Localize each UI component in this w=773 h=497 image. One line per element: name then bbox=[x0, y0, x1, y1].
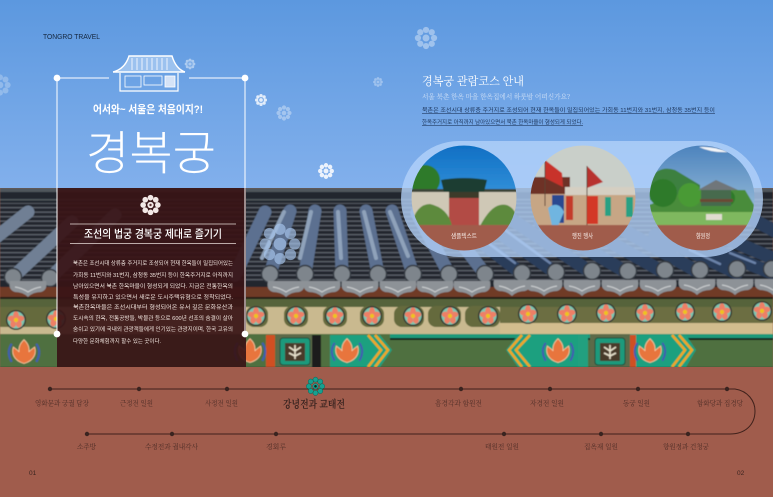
course guide heading: 경복궁 관람코스 안내 bbox=[422, 74, 524, 88]
subtitle: 어서와~ 서울은 처음이지?! bbox=[93, 103, 203, 116]
bottom timeline band bbox=[0, 367, 773, 497]
decorative snow flowers bbox=[0, 27, 437, 264]
course guide description: 북촌은 조선시대 상류층 주거지로 조성되어 현재 한옥들이 밀집되어있는 가회동 11번지와 31번지, 삼청동 35번지 등이 bbox=[422, 106, 715, 114]
body text: 도시속의 한옥, 전통공방들, 박물관 등으로 600년 선조의 숨결이 살아 bbox=[73, 314, 233, 322]
course guide description: 한옥주거지로 아직까지 남아있으면서 북촌 한옥마을이 형성되게 되었다. bbox=[422, 118, 583, 126]
panel: dark text box bbox=[54, 56, 248, 367]
panel heading bbox=[70, 224, 236, 244]
timeline labels bbox=[35, 398, 743, 451]
body text: 남아있으면서 북촌 한옥마을이 형성되게 되었다. 지금은 전통한옥의 bbox=[73, 282, 233, 290]
brand label: TONGRO TRAVEL bbox=[43, 34, 100, 41]
panel heading: 조선의 법궁 경복궁 제대로 즐기기 bbox=[84, 226, 222, 240]
course guide subheading: 서울 북촌 한옥 마을 한옥집에서 하룻밤 어떠신가요? bbox=[422, 92, 570, 101]
caption: 행진 행사 bbox=[572, 231, 593, 240]
timeline labels: 흠경각과 함원전 bbox=[435, 398, 482, 408]
frame lines bbox=[57, 78, 245, 335]
timeline labels: 경회루 bbox=[266, 442, 286, 451]
frame dots bbox=[54, 75, 248, 337]
caption: 샘플텍스트 bbox=[451, 232, 477, 240]
icon: teal knot marker bbox=[306, 377, 325, 396]
body text: 북촌은 조선시대 상류층 주거지로 조성되어 현재 한옥들이 밀집되어있는 bbox=[73, 259, 233, 267]
body text bbox=[73, 259, 233, 345]
timeline labels: 동궁 일원 bbox=[623, 398, 650, 408]
timeline labels: 영화문과 궁궐 담장 bbox=[35, 398, 89, 408]
body text: 숨쉬고 있기에 국내외 관광객들에게 인기있는 관광지이며, 한국 고유의 bbox=[73, 325, 233, 333]
body text: 특성을 유지하고 있으면서 새로운 도시주택유형으로 정착되었다. bbox=[73, 293, 233, 301]
photo circle: 향원정 bbox=[649, 145, 755, 253]
photo: palace roof and painted eaves bbox=[0, 188, 773, 368]
timeline labels: 강녕전과 교태전 bbox=[283, 398, 345, 410]
timeline labels: 사정전 일원 bbox=[205, 398, 238, 408]
pill: photo tray bbox=[401, 141, 763, 257]
course guide description bbox=[422, 106, 715, 126]
body text: 북촌한옥마을은 조선시대부터 형성되어온 유서 깊은 문화유산과 bbox=[73, 303, 233, 311]
page number 01: 01 bbox=[29, 470, 37, 477]
page number 02: 02 bbox=[737, 470, 745, 477]
icon: white knot flower bbox=[140, 195, 161, 215]
timeline labels: 수정전과 궐내각사 bbox=[145, 442, 198, 451]
icon: hanok house bbox=[113, 56, 185, 91]
body text: 다양한 문화체험까지 할수 있는 곳이다. bbox=[73, 337, 161, 345]
timeline labels: 함화당과 집경당 bbox=[697, 398, 743, 408]
timeline route bbox=[48, 387, 755, 436]
timeline labels: 소주방 bbox=[77, 442, 96, 451]
background: sky bbox=[0, 0, 773, 188]
timeline labels: 근정전 일원 bbox=[120, 398, 153, 408]
body text: 가회동 11번지와 31번지, 삼청동 35번지 등이 한옥주거지로 아직까지 bbox=[73, 271, 233, 279]
timeline labels: 태원전 일원 bbox=[485, 442, 519, 451]
photo circle: 샘플텍스트 bbox=[410, 145, 520, 253]
caption: 향원정 bbox=[696, 231, 710, 240]
photo circle: 행진 행사 bbox=[530, 145, 636, 253]
title: 경복궁 bbox=[86, 127, 216, 180]
timeline labels: 집옥재 일원 bbox=[584, 442, 618, 451]
timeline labels: 자경전 일원 bbox=[530, 398, 564, 408]
timeline labels: 향원정과 건청궁 bbox=[663, 442, 709, 451]
